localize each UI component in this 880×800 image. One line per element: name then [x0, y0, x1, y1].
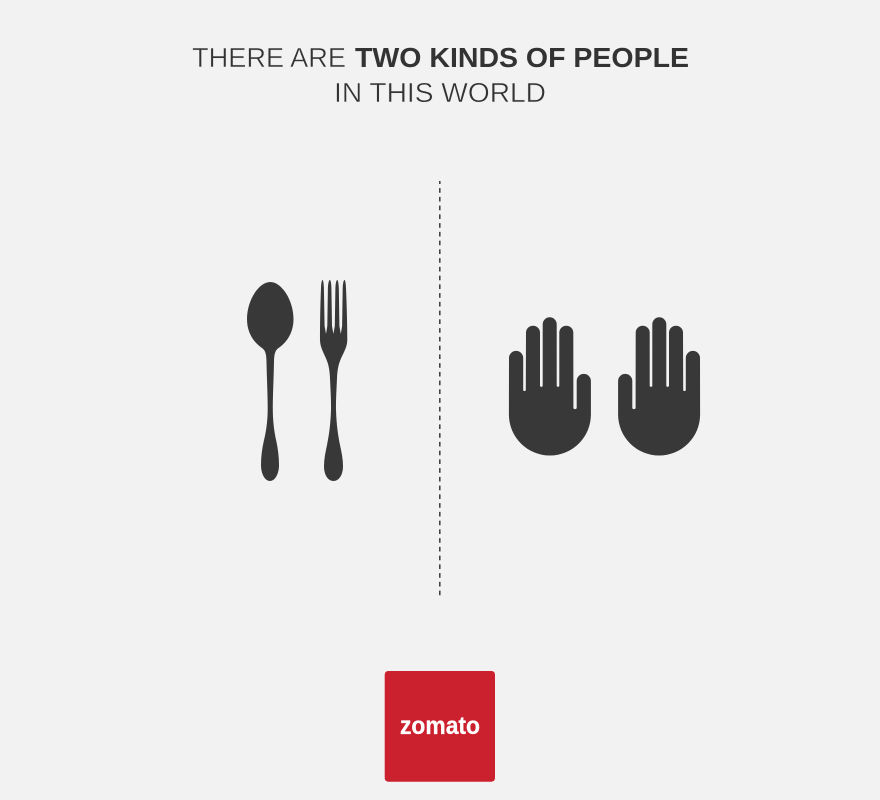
icon: spoon [247, 282, 294, 481]
logo: zomato [385, 671, 495, 782]
icon: left hand [509, 317, 591, 456]
title: THERE ARE [192, 42, 346, 73]
logo: zomato: zomato [400, 712, 480, 740]
icon: right hand [618, 317, 700, 456]
title: TWO KINDS OF PEOPLE [355, 42, 689, 73]
icon: fork [320, 280, 347, 481]
dashed divider [439, 181, 441, 597]
title [192, 42, 689, 108]
title: IN THIS WORLD [334, 77, 546, 108]
